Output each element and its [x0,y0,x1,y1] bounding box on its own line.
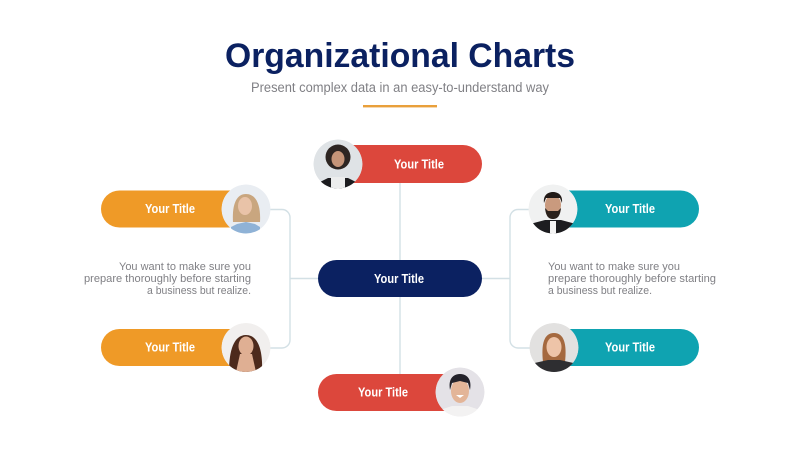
left description: a business but realize. [147,285,251,297]
top node: Your Title [394,158,444,172]
left bottom node: Your Title [145,340,195,354]
right description: a business but realize. [548,285,652,297]
avatar: man with short dark hair [436,368,484,420]
avatar: brunette woman [222,323,270,372]
left top node [101,184,270,236]
left description: You want to make sure you [119,261,251,273]
right bottom node: Your Title [605,340,655,354]
right description: You want to make sure you [548,261,680,273]
right top node: Your Title [605,202,655,216]
right top node [528,184,699,236]
central node [318,260,482,297]
left description: prepare thoroughly before starting [84,273,251,285]
left description [84,261,251,297]
accent underline [363,105,437,107]
bottom node [318,368,484,420]
right description [548,261,716,297]
top node [314,140,482,192]
avatar: blonde woman with glasses [222,184,270,236]
left top node: Your Title [145,202,195,216]
title: Organizational Charts [225,37,575,75]
subtitle: Present complex data in an easy-to-understand way [251,80,549,95]
right bottom node [530,323,699,375]
avatar: bearded man [528,184,578,236]
avatar: smiling woman with auburn hair [530,323,578,375]
avatar: woman with dark curly hair [314,140,362,192]
central node: Your Title [374,272,424,286]
right description: prepare thoroughly before starting [548,273,716,285]
left bottom node [101,323,270,372]
bottom node: Your Title [358,386,408,400]
connector lines [268,183,532,374]
